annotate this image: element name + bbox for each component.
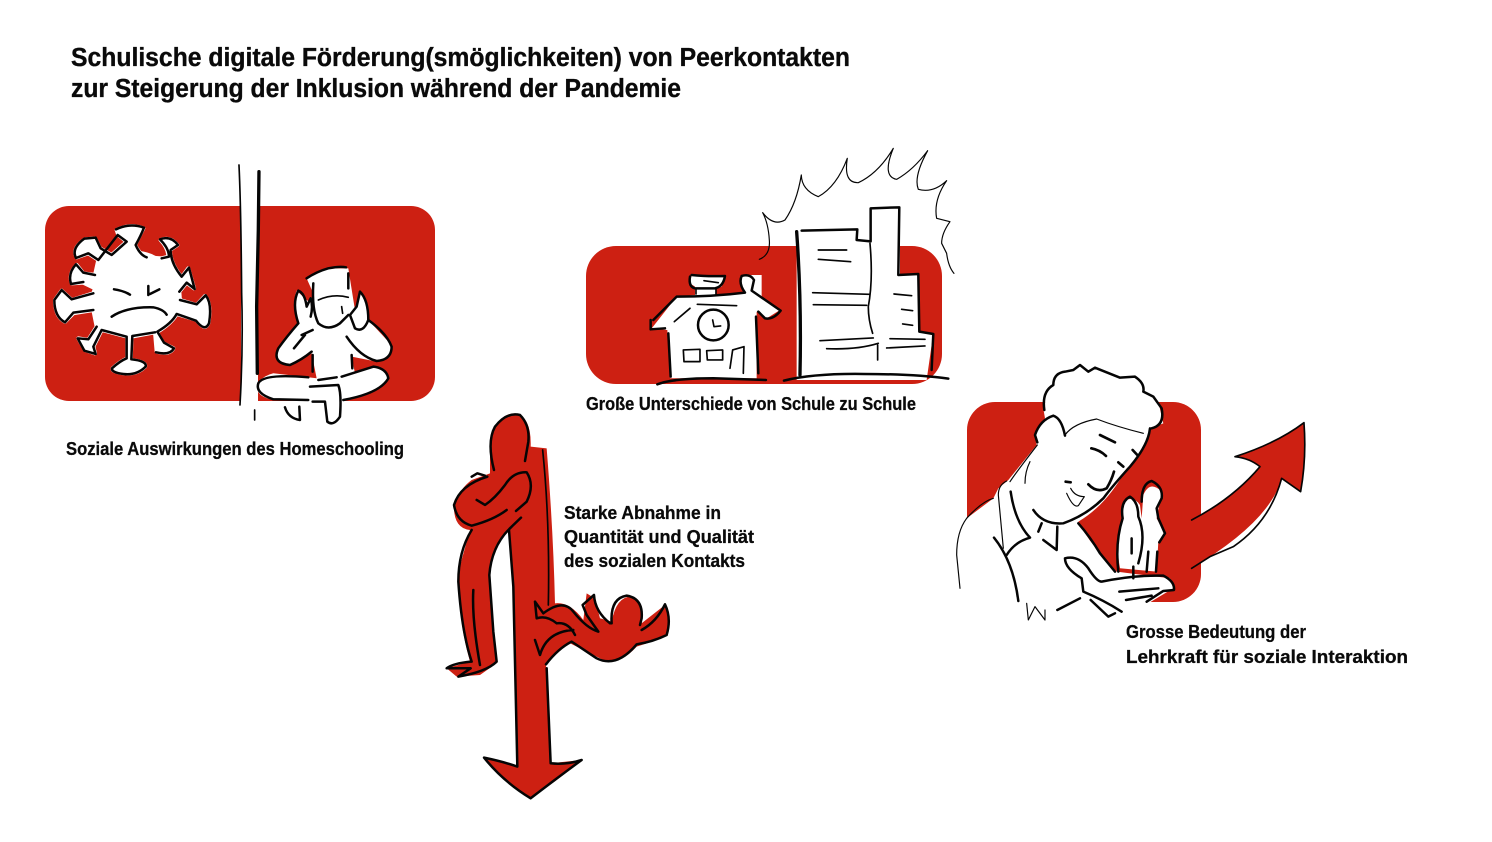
- red background panel: [586, 246, 942, 384]
- icon: teacher holding small figures: [957, 365, 1174, 620]
- caption: des sozialen Kontakts: [564, 550, 745, 571]
- panel: differences between schools: [586, 148, 954, 414]
- red background panel with wall gap: [45, 200, 435, 405]
- title: [71, 44, 850, 103]
- red background panel: [967, 402, 1201, 602]
- icon: small school with clock: [651, 275, 781, 378]
- icon: angry virus: [54, 226, 210, 374]
- caption: Große Unterschiede von Schule zu Schule: [586, 393, 916, 414]
- caption: Quantität und Qualität: [564, 526, 754, 547]
- icon: isolated child with masked face: [257, 267, 392, 423]
- caption: Soziale Auswirkungen des Homeschooling: [66, 438, 404, 459]
- caption: Lehrkraft für soziale Interaktion: [1126, 646, 1408, 667]
- caption: Starke Abnahme in: [564, 502, 721, 523]
- icon: rising arrow: [1192, 423, 1305, 568]
- icon: falling arrow with figures: [447, 413, 669, 798]
- icon: spiky halo: [759, 148, 954, 380]
- icon: large school building: [657, 207, 948, 384]
- caption: [564, 502, 754, 571]
- title: zur Steigerung der Inklusion während der Pandemie: [71, 75, 681, 103]
- wall lines: [239, 165, 259, 420]
- panel: importance of the teacher: [957, 365, 1408, 667]
- caption: Grosse Bedeutung der: [1126, 621, 1306, 642]
- title: Schulische digitale Förderung(smöglichkeiten) von Peerkontakten: [71, 44, 850, 72]
- panel: decline in social contact: [447, 413, 754, 798]
- caption: [1126, 621, 1408, 667]
- panel: social effects of homeschooling: [45, 165, 435, 459]
